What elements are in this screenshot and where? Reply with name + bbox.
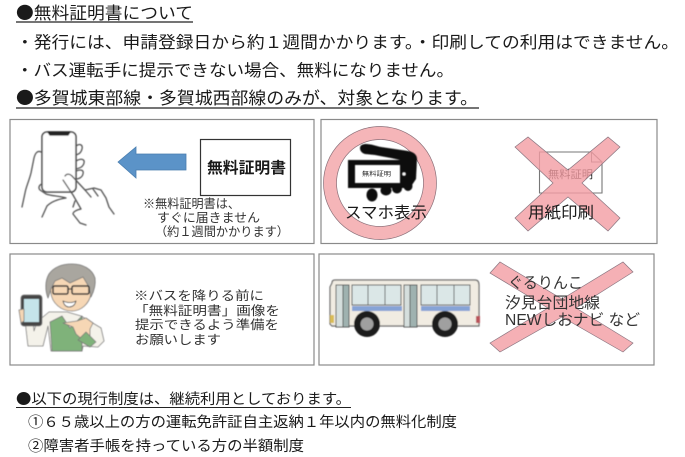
panel: smartphone display OK, paper print not OK <box>321 120 657 244</box>
icon: pink circle with phone <box>324 126 436 240</box>
note: prepare image <box>134 288 280 347</box>
icon: crossed-out paper print: 用紙印刷 <box>528 204 594 222</box>
note: delivery time: すぐに届きません <box>157 211 260 225</box>
heading: eligible routes: ●多賀城東部線・多賀城西部線のみが、対象となります。 <box>16 84 478 109</box>
heading: continuing programs: ●以下の現行制度は、継続利用としております。 <box>16 388 351 409</box>
note: prepare image: お願いします <box>135 333 221 347</box>
text block: issue notes <box>16 33 679 80</box>
certificate box <box>200 140 290 196</box>
note: delivery time: ※無料証明書は、 <box>143 196 240 211</box>
note: prepare image: ※バスを降りる前に <box>134 288 264 303</box>
note: delivery time: （約１週間かかります） <box>155 224 289 239</box>
icon: bus <box>330 280 480 337</box>
text block: programs list <box>28 414 457 455</box>
panel: bus and excluded routes <box>319 254 654 365</box>
text block: programs list: ①６５歳以上の方の運転免許証自主返納１年以内の無料化制度 <box>28 414 457 431</box>
note: prepare image: 提示できるよう準備を <box>135 317 279 332</box>
icon: crossed-out routes <box>490 262 641 352</box>
icon: crossed-out routes: 汐見台団地線 <box>505 294 600 312</box>
text block: issue notes: ・バス運転手に提示できない場合、無料になりません。 <box>16 61 454 80</box>
icon: crossed-out paper print: 無料証明 <box>548 167 593 181</box>
note: prepare image: 「無料証明書」画像を <box>134 303 280 318</box>
certificate box: 無料証明書 <box>207 158 286 177</box>
icon: pink circle with phone: スマホ表示 <box>345 204 427 222</box>
icon: crossed-out routes: ぐるりんこ <box>508 275 583 292</box>
panel: phone and certificate <box>10 120 314 244</box>
note: delivery time <box>143 196 289 239</box>
icon: crossed-out paper print <box>515 137 620 231</box>
arrow: blue left arrow <box>118 147 186 178</box>
icon: pink circle with phone: 無料証明 <box>362 170 391 178</box>
text block: issue notes: ・発行には、申請登録日から約１週間かかります。・印刷しての利用はできません。 <box>16 33 679 52</box>
icon: crossed-out routes: NEWしおナビ など <box>505 311 641 329</box>
text block: programs list: ②障害者手帳を持っている方の半額制度 <box>28 438 304 455</box>
icon: older man with smartphone <box>19 264 104 351</box>
panel: show image before getting off <box>10 254 314 365</box>
icon: hands holding smartphone <box>22 132 114 225</box>
